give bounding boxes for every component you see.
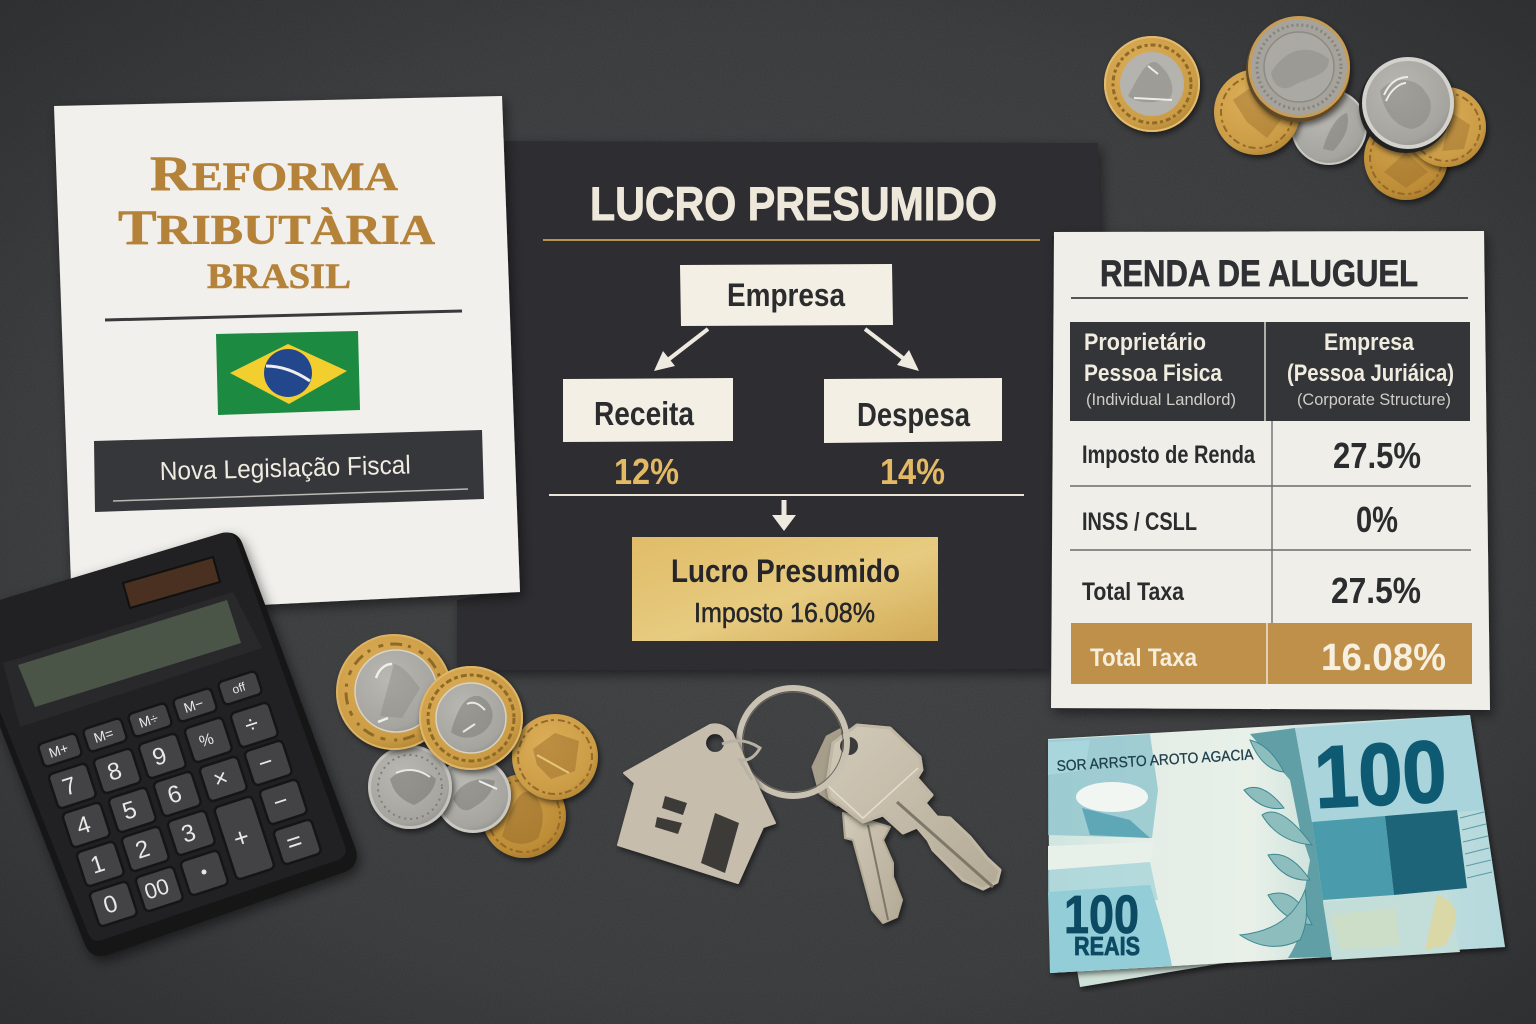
banknote denomination: REAIS — [1074, 931, 1140, 961]
icon: calculator: 00 — [141, 873, 172, 905]
panel: lucro presumido — [457, 141, 1100, 670]
icon: calculator: × — [210, 764, 232, 794]
heading: renda de aluguel: RENDA DE ALUGUEL — [1100, 253, 1418, 294]
coin: silver right — [1359, 57, 1454, 153]
table header: (Individual Landlord) — [1086, 390, 1236, 409]
icon: calculator — [0, 532, 357, 956]
icon: house keychain with keys — [618, 688, 1000, 923]
value: 14%: 14% — [880, 451, 945, 492]
title: reforma tributaria brasil: TRIBUTÀRIA — [118, 199, 436, 255]
box: despesa — [824, 378, 1002, 443]
key ring — [739, 688, 847, 796]
icon: calculator: M= — [92, 725, 115, 746]
coin: bimetal far left — [1104, 36, 1200, 132]
icon: calculator: 9 — [149, 742, 170, 772]
row: total taxa — [1082, 570, 1421, 611]
banknote denomination: 100 — [1064, 885, 1139, 945]
banknote value: 100 — [1312, 721, 1449, 827]
icon: calculator: = — [282, 825, 306, 858]
icon: calculator: 0 — [100, 890, 121, 920]
icon: calculator: M÷ — [137, 710, 160, 731]
house fob — [618, 724, 775, 883]
icon: calculator: 3 — [178, 819, 199, 849]
row: total taxa highlight: 16.08% — [1321, 637, 1446, 679]
box: empresa: Empresa — [727, 277, 845, 313]
icon: calculator: off — [230, 679, 248, 697]
row: inss csll: 0% — [1356, 499, 1398, 540]
coin: bimetal center — [419, 666, 523, 770]
title: reforma tributaria brasil — [118, 145, 436, 296]
coin: gold left — [1214, 69, 1300, 155]
row: imposto de renda: Imposto de Renda — [1082, 441, 1256, 469]
arrow: empresa to despesa — [865, 329, 919, 371]
icon: calculator: − — [255, 748, 277, 778]
coins: top right cluster — [1104, 16, 1486, 200]
value: 12%: 12% — [614, 451, 679, 492]
row: total taxa: Total Taxa — [1082, 578, 1185, 606]
icon: calculator: ÷ — [241, 710, 262, 740]
box: receita: Receita — [594, 395, 695, 432]
icon: calculator: 1 — [87, 850, 108, 880]
coin: bimetal left — [337, 635, 451, 749]
icon: calculator: 7 — [59, 772, 80, 802]
title: reforma tributaria brasil: BRASIL — [207, 256, 351, 296]
coins: middle cluster — [337, 635, 598, 858]
row: total taxa: 27.5% — [1331, 570, 1421, 611]
panel: reforma tributaria paper — [54, 96, 520, 612]
arrow: empresa to receita — [654, 329, 708, 371]
table header: Proprietário — [1084, 329, 1206, 356]
row: imposto de renda: 27.5% — [1333, 435, 1421, 476]
table header: Empresa — [1324, 329, 1415, 356]
table header: (Pessoa Juriáica) — [1287, 360, 1454, 387]
table header: Pessoa Fisica — [1084, 360, 1223, 387]
band: nova legislacao fiscal: Nova Legislação Fiscal — [159, 449, 411, 486]
box: lucro presumido result: Lucro Presumido — [671, 553, 900, 589]
key: back — [813, 730, 902, 923]
box: empresa — [680, 264, 893, 326]
table header — [1070, 322, 1470, 421]
row: inss csll: INSS / CSLL — [1082, 508, 1197, 536]
coin: silver left — [368, 745, 452, 829]
icon: brazil flag — [216, 331, 360, 415]
icon: calculator: 6 — [164, 780, 185, 810]
icon: calculator: 4 — [73, 811, 94, 841]
table header: (Corporate Structure) — [1297, 390, 1451, 409]
box: despesa: Despesa — [857, 396, 971, 433]
split ring connector — [722, 741, 760, 780]
row: total taxa highlight — [1071, 623, 1472, 684]
banknote top text: SOR ARRSTO AROTO AGACIA — [1056, 746, 1254, 775]
icon: calculator: 2 — [132, 835, 153, 865]
coin: silver center — [435, 757, 511, 833]
icon: calculator: M+ — [47, 740, 70, 761]
icon: calculator: − — [270, 787, 292, 817]
icon: calculator: M− — [182, 695, 205, 716]
icon: calculator: 5 — [119, 796, 140, 826]
coin: silver lower — [1291, 89, 1367, 165]
coin: silver gold rim top — [1246, 16, 1350, 122]
row: inss csll — [1082, 499, 1398, 540]
row: imposto de renda — [1082, 435, 1421, 476]
icon: calculator: + — [229, 821, 253, 854]
title: reforma tributaria brasil: REFORMA — [150, 145, 398, 201]
icon: 100 reais banknote — [1048, 715, 1505, 987]
box: lucro presumido result — [632, 537, 938, 641]
box: lucro presumido result: Imposto 16.08% — [694, 597, 875, 628]
note foliage — [1240, 728, 1332, 958]
note left pattern — [1048, 734, 1172, 973]
arrow: down to result — [772, 500, 796, 531]
band: nova legislacao fiscal — [94, 430, 484, 512]
key: front — [827, 725, 1000, 889]
coin: gold low right — [1364, 116, 1448, 200]
banknote denomination — [1064, 885, 1140, 961]
icon: calculator: 8 — [104, 757, 125, 787]
icon: calculator: % — [197, 730, 216, 751]
panel: renda de aluguel — [1051, 231, 1490, 710]
box: receita — [563, 378, 733, 442]
heading: lucro presumido: LUCRO PRESUMIDO — [590, 177, 997, 230]
coin: gold back right — [1406, 87, 1486, 167]
coin: gold right — [512, 714, 598, 800]
coin: gold bottom — [482, 774, 566, 858]
row: total taxa highlight: Total Taxa — [1090, 644, 1198, 672]
